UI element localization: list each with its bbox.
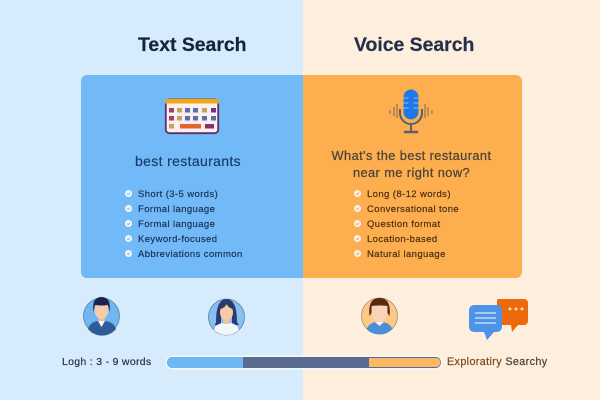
checklist: text search bbox=[125, 189, 243, 260]
avatar: woman bbox=[208, 298, 245, 336]
panel: voice search bbox=[303, 75, 522, 278]
item: Formal language bbox=[138, 204, 215, 215]
check icons bbox=[354, 190, 361, 257]
item: Natural language bbox=[367, 249, 446, 260]
item: Question format bbox=[367, 219, 441, 230]
query: voice search bbox=[331, 148, 492, 180]
title: text search: Text Search bbox=[138, 34, 246, 56]
right background bbox=[303, 0, 600, 400]
query: voice search: What's the best restaurant bbox=[332, 148, 491, 163]
avatar: man in suit bbox=[83, 297, 120, 336]
panel: text search bbox=[81, 75, 303, 278]
item: Keyword-focused bbox=[138, 234, 217, 245]
icon: keyboard bbox=[164, 98, 220, 134]
label: length: Logh : 3 - 9 words bbox=[62, 356, 151, 368]
check icons bbox=[125, 190, 132, 257]
query: voice search: near me right now? bbox=[353, 164, 470, 180]
item: Long (8-12 words) bbox=[367, 189, 451, 200]
icon: microphone bbox=[390, 90, 432, 134]
item: Short (3-5 words) bbox=[138, 189, 218, 200]
progress bar bbox=[166, 356, 442, 370]
checklist: voice search bbox=[354, 189, 459, 260]
label: exploratory search: Exploratiry Searchy bbox=[447, 356, 547, 368]
item: Abbreviations common bbox=[138, 249, 243, 260]
item: Location-based bbox=[367, 234, 438, 245]
item: Conversational tone bbox=[367, 204, 459, 215]
query: text search: best restaurants bbox=[135, 153, 241, 169]
avatar: voice user bbox=[361, 298, 398, 334]
item: Formal language bbox=[138, 219, 215, 230]
icon: chat bubbles bbox=[469, 299, 528, 340]
title: voice search: Voice Search bbox=[354, 34, 474, 56]
